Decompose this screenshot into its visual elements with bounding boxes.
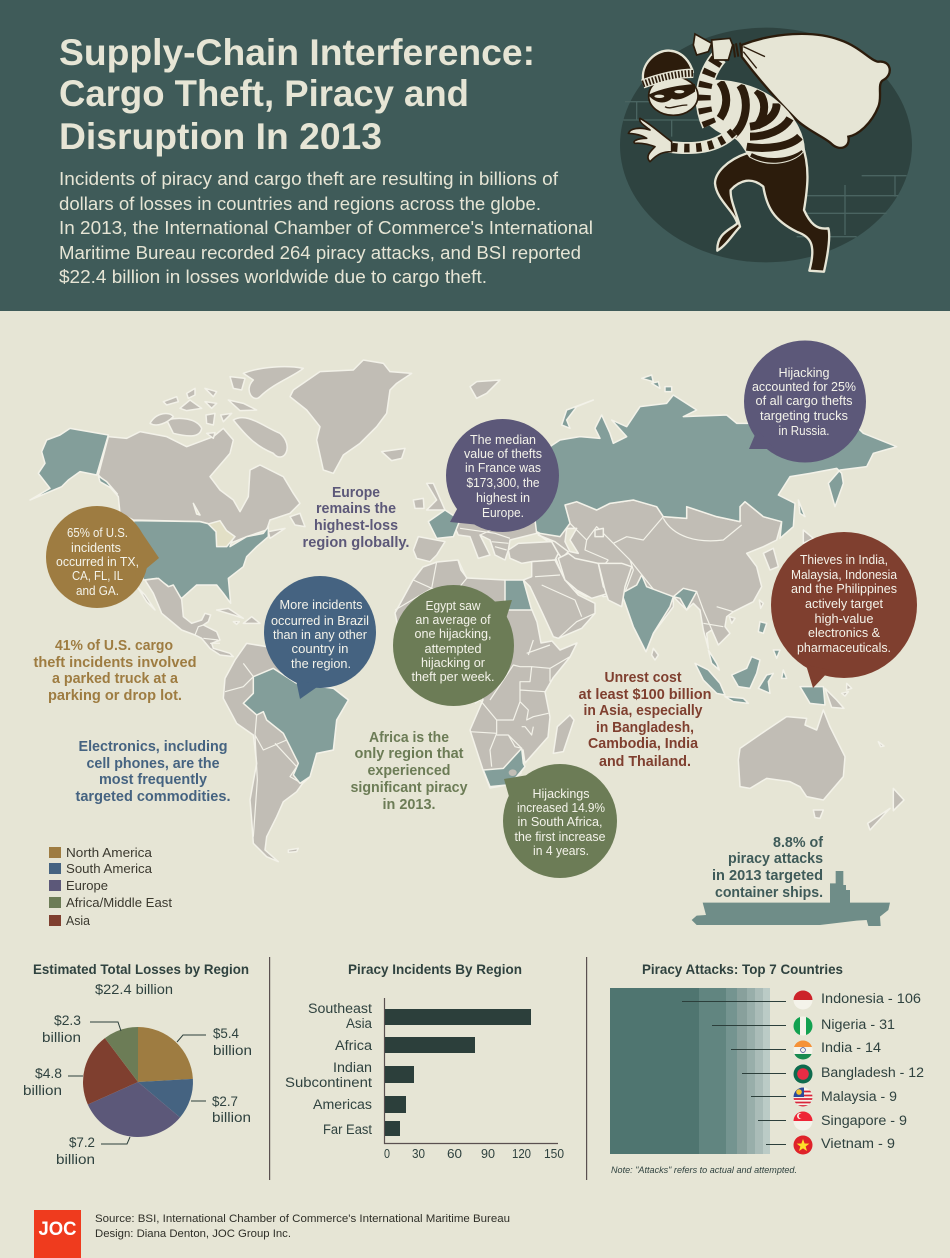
bar chart: Indian [333,1060,372,1076]
bar chart: Americas [313,1097,372,1113]
callout: Asia electronics thefts: pharmaceuticals. [797,640,891,655]
text: Africa piracy: in 2013. [382,797,436,813]
UK and Ireland [413,483,445,510]
open hand [628,118,672,162]
country labels: Singapore - 9 [821,1113,907,1129]
raised hand and sack knot [693,34,733,60]
text: Asia unrest cost: Unrest cost [604,670,682,686]
callout: Russia hijacking: in Russia. [778,423,830,438]
North America [30,360,445,603]
panel: piracy attacks top 7 countries [610,961,924,1176]
text: electronics commodities: most frequently [99,772,208,788]
Southeast Asia, Australia and Oceania [695,650,904,830]
bar chart [285,998,564,1161]
text: Asia unrest cost: and Thailand. [599,754,691,770]
text: container ships: container ships. [715,885,823,901]
callout: South Africa hijacking: the first increase [514,829,606,844]
pie chart [68,1022,206,1144]
text: Asia unrest cost: in Asia, especially [584,703,703,719]
sack [742,34,890,148]
text: Africa piracy: significant piracy [350,780,468,796]
panel: piracy incidents by region [285,961,564,1161]
callout: Brazil incidents: the region. [291,656,351,671]
bar chart: 120 [512,1147,531,1161]
Asia and Russia [470,375,897,660]
country labels [821,991,924,1152]
callout: Asia electronics thefts: electronics & [808,625,880,640]
text: container ships: piracy attacks [728,851,823,867]
text: electronics commodities: Electronics, including [78,739,228,755]
text: container ships: 8.8% of [773,835,823,851]
heading: incidents: Piracy Incidents By Region [348,961,522,977]
total losses: $22.4 billion [95,982,173,998]
callout: Asia electronics thefts: and the Philippines [791,581,897,596]
header panel [0,0,950,311]
country labels: Bangladesh - 12 [821,1065,924,1081]
callout: Egypt hijacking: one hijacking, [414,626,492,641]
callout: USA incidents: CA, FL, IL [72,568,123,583]
title: Supply-Chain Interference: [59,32,535,73]
callout: Egypt hijacking: an average of [416,612,491,627]
flag: Malaysia [793,1087,813,1107]
callout: USA incidents: and GA. [76,583,119,598]
heading: losses: Estimated Total Losses by Region [33,961,249,977]
callout: Brazil incidents [264,576,376,699]
country labels: Malaysia - 9 [821,1089,897,1105]
bar chart: Southeast [308,1001,372,1017]
raised arm [704,57,719,125]
illustration: burglar carrying a sack [620,28,912,272]
callout: Asia electronics thefts: Malaysia, Indonesia [791,567,898,582]
legs [715,143,829,272]
legend [49,845,172,928]
intro text: $22.4 billion in losses worldwide due to cargo theft. [59,267,487,287]
text: Africa piracy: experienced [368,763,450,779]
callout: Egypt hijacking: theft per week. [412,669,494,684]
Africa outline [395,560,577,788]
callout: France median theft: Europe. [482,505,524,520]
pie labels: billion [23,1083,62,1099]
head with beanie and mask [649,77,698,115]
text: Asia unrest cost: Cambodia, India [588,736,699,752]
flag: Vietnam [794,1136,812,1154]
East and southern Africa [470,640,574,787]
pie labels [23,1013,252,1168]
callout: USA incidents [46,506,159,608]
legend: South America [66,861,153,876]
callout: France median theft [446,419,559,532]
intro text: Incidents of piracy and cargo theft are resulting in billions of [59,169,559,189]
callout: Russia hijacking: of all cargo thefts [756,393,852,408]
legend: North America [66,845,153,860]
flag: India [794,1040,812,1060]
country labels: Vietnam - 9 [821,1136,895,1152]
flag: Indonesia [793,990,813,1010]
pie labels: billion [56,1152,95,1168]
flag: Nigeria [793,1016,813,1036]
South America [223,643,348,862]
source credits [95,1213,510,1240]
text: Europe highest loss: remains the [316,501,396,517]
intro text: dollars of losses in countries and regions across the globe. [59,194,541,214]
bar chart: Asia [346,1016,372,1032]
text: electronics commodities [76,739,230,805]
pie labels: $4.8 [35,1066,62,1082]
callout: Asia electronics thefts [771,532,917,688]
bar chart: 90 [481,1147,495,1161]
title [59,32,535,157]
text: electronics commodities: targeted commodities. [76,789,230,805]
text: U.S. cargo theft [34,638,196,704]
callout: USA incidents: 65% of U.S. [67,525,128,540]
pie labels: $2.3 [54,1013,81,1029]
text: U.S. cargo theft: theft incidents involved [34,655,196,671]
callout: Russia hijacking: Hijacking [778,365,830,380]
callout: Egypt hijacking: hijacking or [421,655,486,670]
text: Asia unrest cost [578,670,712,770]
title: Cargo Theft, Piracy and [59,73,469,114]
intro text [59,169,593,287]
pie labels: $5.4 [213,1026,239,1042]
callout: South Africa hijacking: in 4 years. [533,843,589,858]
country labels: India - 14 [821,1040,881,1056]
text: electronics commodities: cell phones, are the [86,756,220,772]
text: Asia unrest cost: in Bangladesh, [596,720,694,736]
pie labels: billion [42,1030,81,1046]
source credits: Source: BSI, International Chamber of Commerce's International Maritime Bureau [95,1213,510,1225]
text: Europe highest loss: highest-loss [314,518,398,534]
callout: Brazil incidents: occurred in Brazil [271,613,369,628]
text: container ships [712,835,823,901]
callout: South Africa hijacking: Hijackings [532,786,590,801]
callout: USA incidents: occurred in TX, [56,554,139,569]
flag: Bangladesh [794,1064,812,1084]
Mexico, Central America and Caribbean [138,578,260,657]
pie labels: billion [213,1043,252,1059]
bar chart: Subcontinent [285,1075,372,1091]
callout: Egypt hijacking [393,585,514,706]
legend: Europe [66,878,108,893]
pie labels: billion [212,1110,251,1126]
bar chart: Africa [335,1038,372,1054]
intro text: Maritime Bureau recorded 264 piracy attacks, and BSI reported [59,243,581,263]
text: Europe highest loss: region globally. [302,535,410,551]
source credits: Design: Diana Denton, JOC Group Inc. [95,1228,291,1240]
heading: attacks: Piracy Attacks: Top 7 Countries [642,961,843,977]
text: U.S. cargo theft: 41% of U.S. cargo [55,638,173,654]
pie labels: $2.7 [212,1094,238,1110]
callout: France median theft: highest in [476,490,530,505]
bar chart: 150 [544,1147,564,1161]
callout: USA incidents: incidents [71,540,121,555]
text: container ships: in 2013 targeted [712,868,823,884]
title: Disruption In 2013 [59,116,382,157]
proportional area chart [610,988,786,1154]
callout: Asia electronics thefts: high-value [814,611,874,626]
callout: South Africa hijacking [503,764,617,878]
callout: Brazil incidents: country in [292,641,348,656]
callout: Brazil incidents: than in any other [273,627,368,642]
callout: Asia electronics thefts: Thieves in India, [800,552,888,567]
note: Note: "Attacks" refers to actual and attempted. [611,1165,797,1176]
text: Asia unrest cost: at least $100 billion [578,687,712,703]
callout: Russia hijacking [744,340,866,462]
intro text: In 2013, the International Chamber of Commerce's International [59,218,593,238]
text: Africa piracy [350,730,468,813]
legend: Africa/Middle East [66,895,172,910]
country labels: Nigeria - 31 [821,1017,895,1033]
callout: Brazil incidents: More incidents [280,597,362,612]
bar chart: 0 [384,1147,390,1161]
bar chart: 30 [412,1147,425,1161]
lower arm [668,132,733,148]
panel: estimated total losses [23,961,252,1168]
bar chart: 60 [447,1147,462,1161]
callout: Asia electronics thefts: actively target [805,596,883,611]
text: Africa piracy: only region that [354,746,464,762]
country labels: Indonesia - 106 [821,991,921,1007]
callout: France median theft: $173,300, the [466,475,540,490]
callout: France median theft: value of thefts [464,446,542,461]
callout: France median theft: in France was [465,460,541,475]
text: U.S. cargo theft: a parked truck at a [52,671,179,687]
icon: container ship [692,871,890,926]
callout: France median theft: The median [470,432,536,447]
callout: South Africa hijacking: in South Africa, [518,814,602,829]
world map [30,360,904,862]
text: Europe highest loss [302,485,410,551]
torso with stripes [700,81,804,163]
callout: Egypt hijacking: Egypt saw [426,598,481,613]
callout: Russia hijacking: accounted for 25% [752,379,856,394]
logo: JOC: JOC [38,1219,77,1240]
flag: Singapore [793,1111,813,1131]
text: U.S. cargo theft: parking or drop lot. [48,688,182,704]
text: Africa piracy: Africa is the [369,730,449,746]
logo: JOC [34,1210,81,1258]
text: Europe highest loss: Europe [332,485,380,501]
callout: Egypt hijacking: attempted [424,641,482,656]
bar chart: Far East [323,1122,372,1138]
Europe and Middle East [395,510,632,638]
pie labels: $7.2 [69,1135,95,1151]
callout: Russia hijacking: targeting trucks [760,408,848,423]
callout: South Africa hijacking: increased 14.9% [517,800,605,815]
legend: Asia [66,913,91,928]
